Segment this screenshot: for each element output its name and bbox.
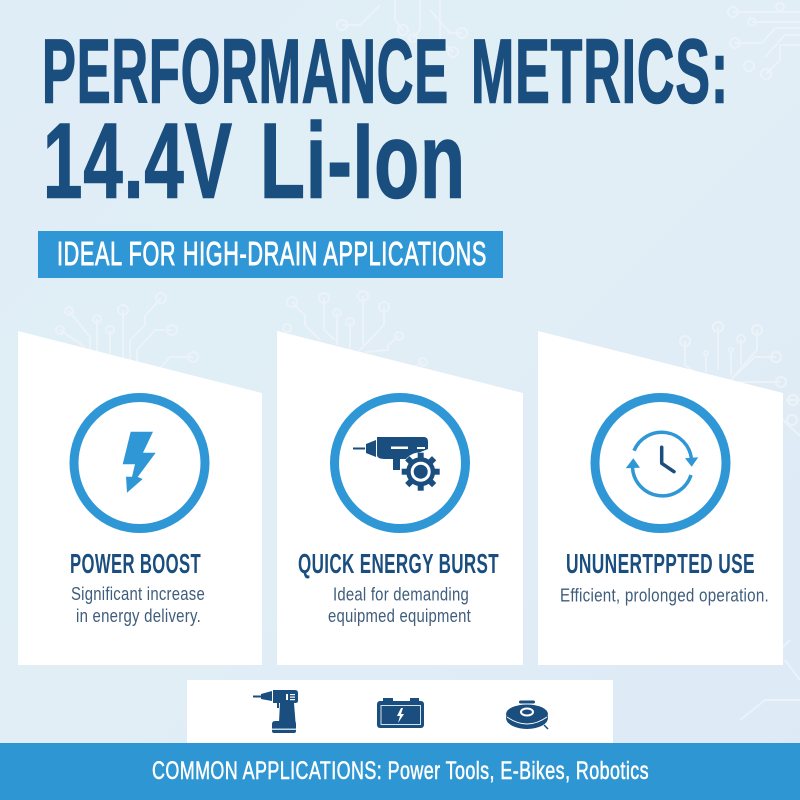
title	[42, 22, 729, 220]
icon: clock with arrows	[595, 398, 726, 528]
footer bar	[0, 743, 800, 800]
title: PERFORMANCE	[42, 22, 449, 122]
heading: POWER BOOST	[70, 548, 201, 579]
description: Significant increase	[71, 583, 205, 604]
panel: uninterrupted use	[538, 331, 783, 665]
subtitle banner	[38, 231, 503, 278]
icon: battery	[377, 698, 424, 728]
panel: application icons	[187, 680, 613, 744]
subtitle banner: IDEAL FOR HIGH-DRAIN APPLICATIONS	[57, 235, 487, 272]
icon: power drill	[253, 690, 298, 733]
description: in energy delivery.	[76, 605, 201, 626]
description	[71, 583, 205, 626]
description: equipmed equipment	[328, 605, 471, 626]
panel: quick energy burst	[277, 331, 523, 665]
icon: robot vacuum	[506, 700, 548, 729]
heading: QUICK ENERGY BURST	[298, 548, 499, 579]
description: Ideal for demanding	[333, 584, 469, 604]
icon: drill and gear	[334, 398, 466, 528]
description	[328, 584, 471, 626]
title: 14.4V	[43, 100, 233, 220]
panel: power boost	[18, 331, 262, 665]
title: Li-Ion	[260, 100, 466, 220]
icon: lightning bolt	[74, 398, 205, 528]
